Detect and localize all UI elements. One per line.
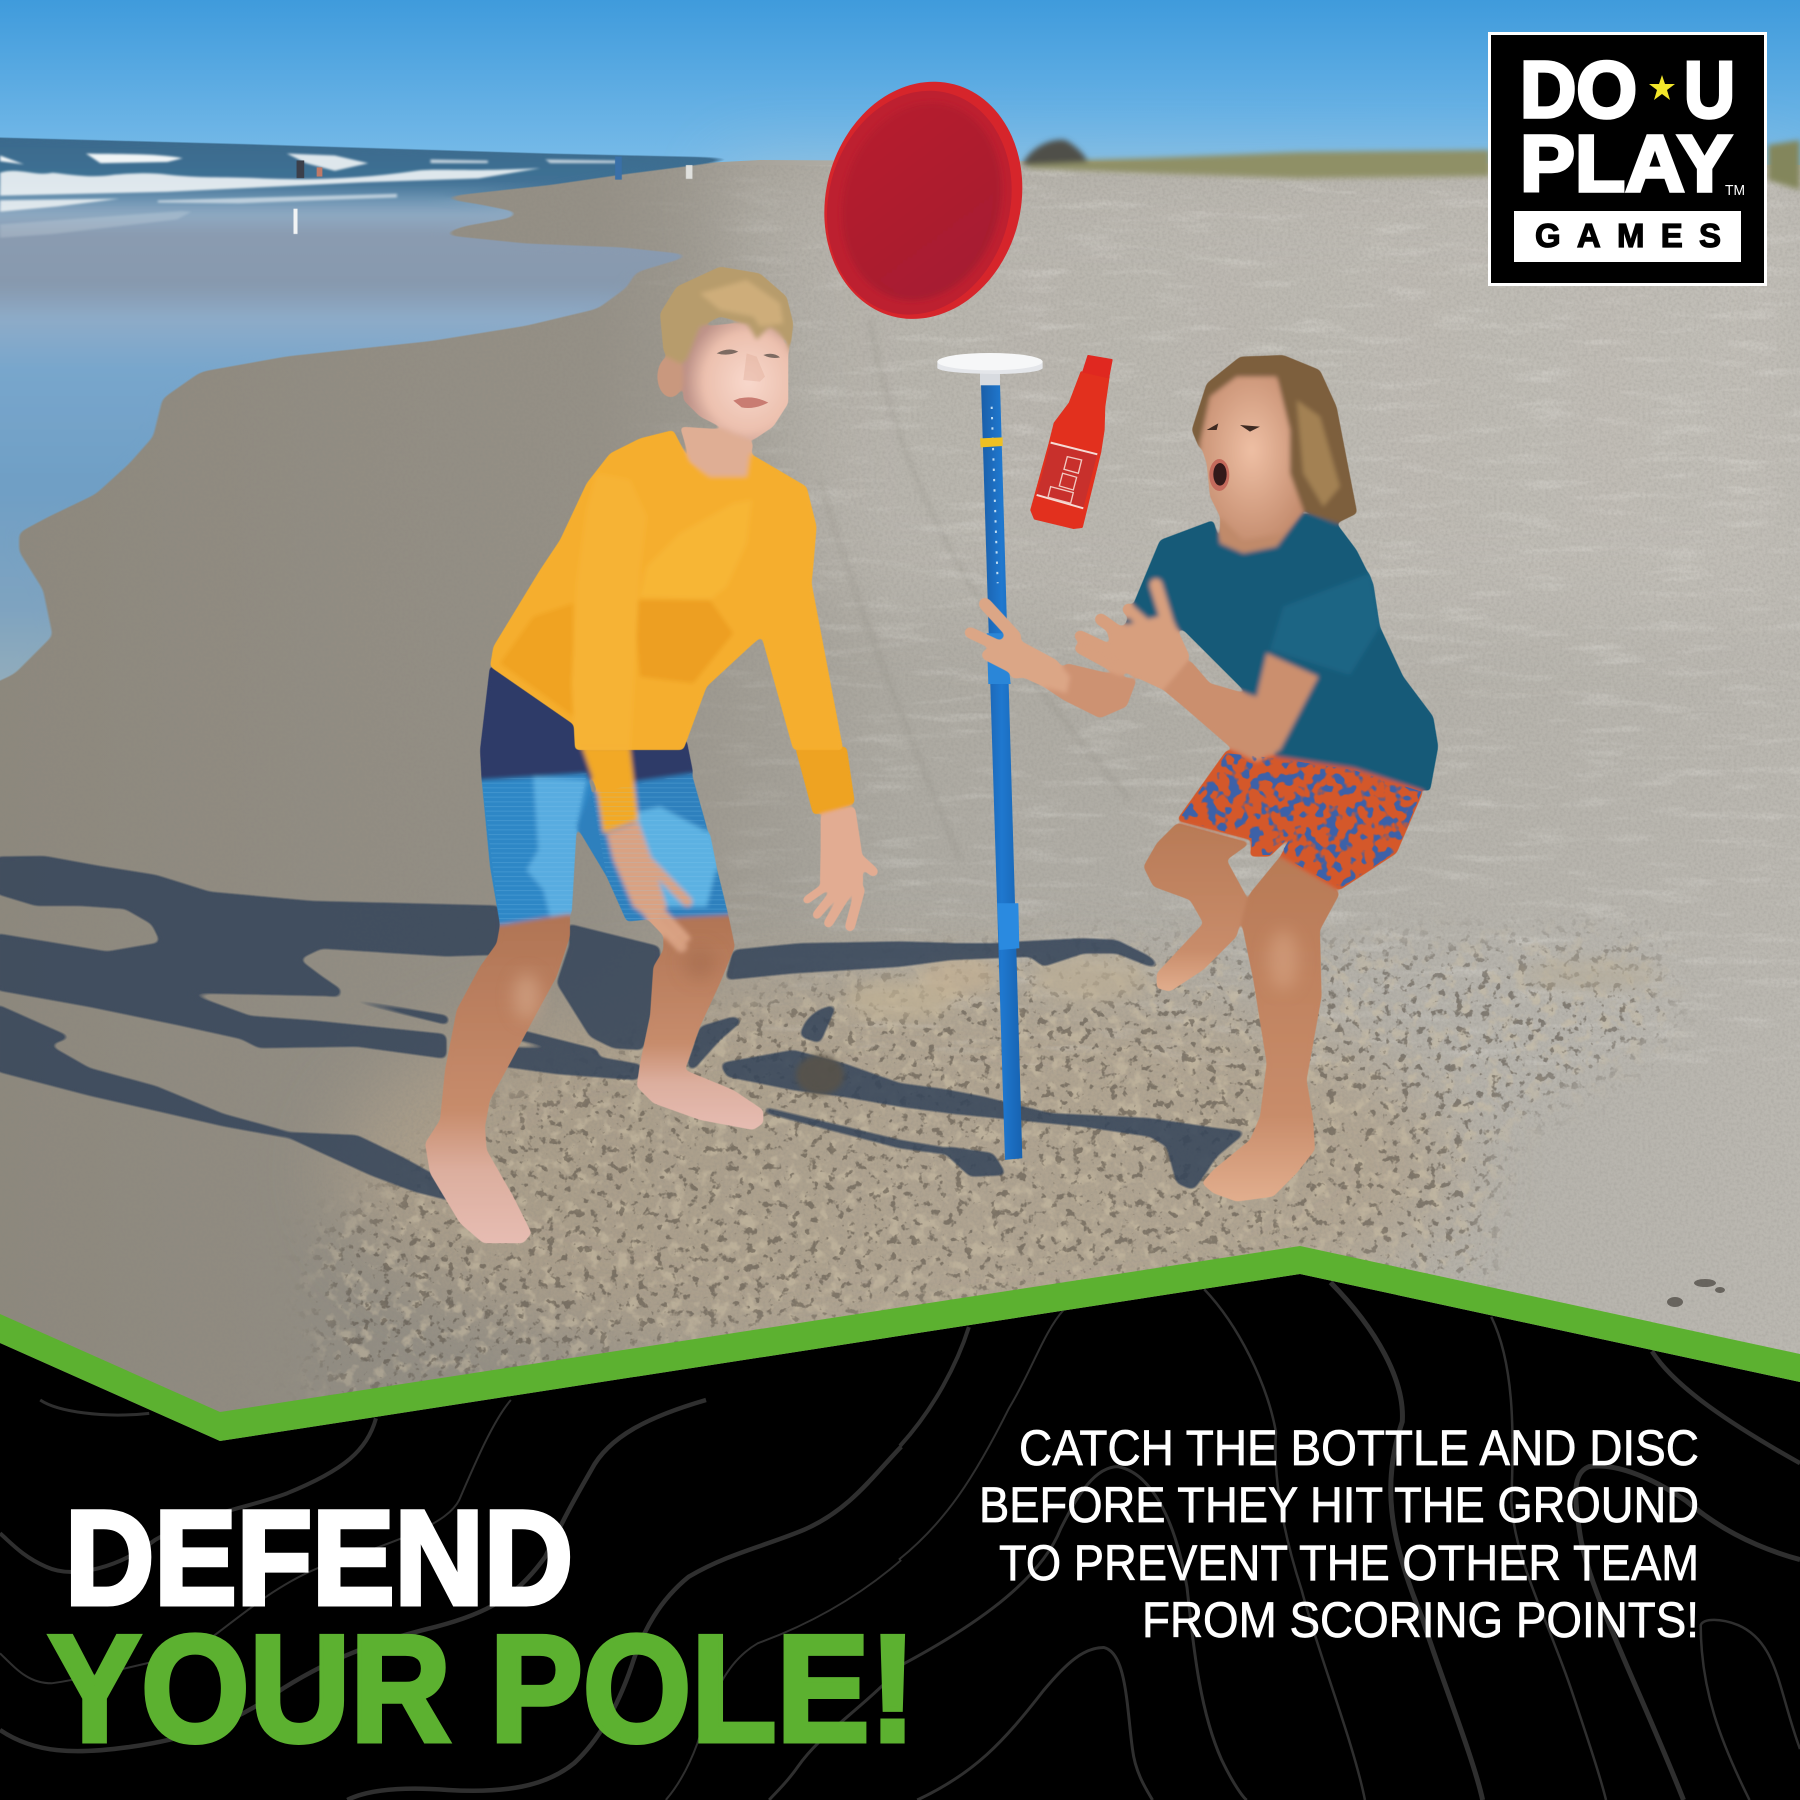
sky <box>0 0 1800 185</box>
near hand <box>1080 585 1190 690</box>
shorts: right leg <box>577 773 728 922</box>
description text: TO PREVENT THE OTHER TEAM <box>999 1535 1699 1591</box>
pole joint upper <box>987 633 1011 684</box>
red bottle <box>1032 356 1112 528</box>
logo word PLAY: PLAY <box>1520 119 1732 208</box>
water <box>0 137 750 689</box>
logo word U: U <box>1684 45 1735 134</box>
shadows on the left <box>0 856 643 1204</box>
red flying disc <box>798 59 1048 341</box>
shadows by the pole <box>948 938 1247 1190</box>
far arm <box>1043 663 1137 718</box>
front leg <box>1202 857 1340 1202</box>
bottle cap <box>1083 356 1112 377</box>
left leg <box>425 913 570 1243</box>
leg tone highlights <box>513 947 717 1020</box>
shorts: light patches <box>527 777 587 917</box>
bottle label <box>1037 443 1097 508</box>
shorts: left leg <box>482 773 592 925</box>
distant grass and dune <box>1020 140 1800 190</box>
yellow clamp <box>980 437 1003 447</box>
shorts stripe texture <box>482 773 728 925</box>
hair highlight <box>1297 400 1340 507</box>
boy in yellow shirt, lower body <box>425 665 873 1243</box>
description text <box>979 1420 1699 1648</box>
front sleeve cuff <box>582 747 638 833</box>
face <box>683 323 788 440</box>
neck <box>680 427 753 478</box>
far arm and hand <box>807 807 873 927</box>
logo word DO: DO <box>1520 45 1637 134</box>
warm foreground sand <box>340 970 1460 1370</box>
logo trademark: TM <box>1725 182 1745 199</box>
headline: defend: DEFEND <box>65 1484 573 1633</box>
front sleeve <box>572 473 647 750</box>
shadows centre <box>557 923 950 1155</box>
shirt light panel <box>640 500 752 600</box>
shirt shade lower <box>633 600 733 683</box>
near arm and hand <box>607 822 687 947</box>
neck <box>1220 510 1303 553</box>
sand grain <box>0 165 1800 1465</box>
headline: your pole: YOUR POLE! <box>48 1604 916 1774</box>
shirt body <box>490 430 843 750</box>
floral shorts <box>1177 750 1423 890</box>
logo: Do U Play Games <box>1490 34 1766 284</box>
pole tick marks <box>992 407 998 583</box>
ear <box>657 356 684 397</box>
description text: FROM SCORING POINTS! <box>1142 1592 1699 1648</box>
pole joint lower <box>997 903 1019 950</box>
churned sand dark clumps <box>302 918 1688 1393</box>
sand footprints and tracks texture <box>734 170 1800 1065</box>
far dry sand highlight <box>720 165 1800 640</box>
floral shorts pattern <box>1178 753 1422 888</box>
description text: BEFORE THEY HIT THE GROUND <box>979 1477 1699 1533</box>
near arm <box>1163 653 1318 762</box>
white stake in the water <box>294 209 298 234</box>
topographic contour lines, left <box>0 1400 901 1800</box>
logo games box <box>1514 211 1741 262</box>
sand pit <box>796 1055 844 1095</box>
churned sand light clumps <box>310 947 1642 1392</box>
sand mounds near the pole <box>845 954 1660 1020</box>
boy in yellow shirt, upper body <box>490 267 843 750</box>
dark lower panel <box>0 1274 1800 1800</box>
teal boy leg highlight <box>1268 930 1298 990</box>
yellow shirt face details <box>717 350 780 408</box>
footprints lower right <box>1667 1279 1725 1307</box>
green angled band <box>0 1246 1800 1441</box>
description text: CATCH THE BOTTLE AND DISC <box>1019 1420 1699 1476</box>
back leg <box>1143 823 1250 992</box>
sea and wet shoreline <box>0 137 750 689</box>
shirt <box>1125 513 1438 792</box>
logo word GAMES: GAMES <box>1535 217 1721 254</box>
hair back <box>1192 355 1357 523</box>
boy in teal shirt <box>970 355 1438 1202</box>
tyre track <box>820 320 1130 860</box>
teal shirt face details <box>1207 423 1260 491</box>
cast shadows <box>0 856 1247 1204</box>
far hand <box>970 604 1070 693</box>
white pole top plate <box>937 353 1043 385</box>
shirt sleeve shade <box>1270 573 1380 675</box>
blue pole <box>980 383 1022 1160</box>
sand base <box>0 160 1800 1460</box>
hair highlight <box>700 280 783 327</box>
logo star <box>1649 75 1675 100</box>
churned sand <box>306 918 1688 1393</box>
hair <box>660 267 793 363</box>
shorts: waistband <box>480 665 693 783</box>
right leg <box>637 915 763 1130</box>
face <box>1200 377 1303 540</box>
far sleeve cuff <box>795 747 855 815</box>
shirt shade left <box>500 603 573 717</box>
breaking waves <box>0 154 617 238</box>
label icons <box>1048 457 1082 503</box>
topographic contour lines, right <box>899 1282 1800 1800</box>
far figures <box>297 157 693 180</box>
